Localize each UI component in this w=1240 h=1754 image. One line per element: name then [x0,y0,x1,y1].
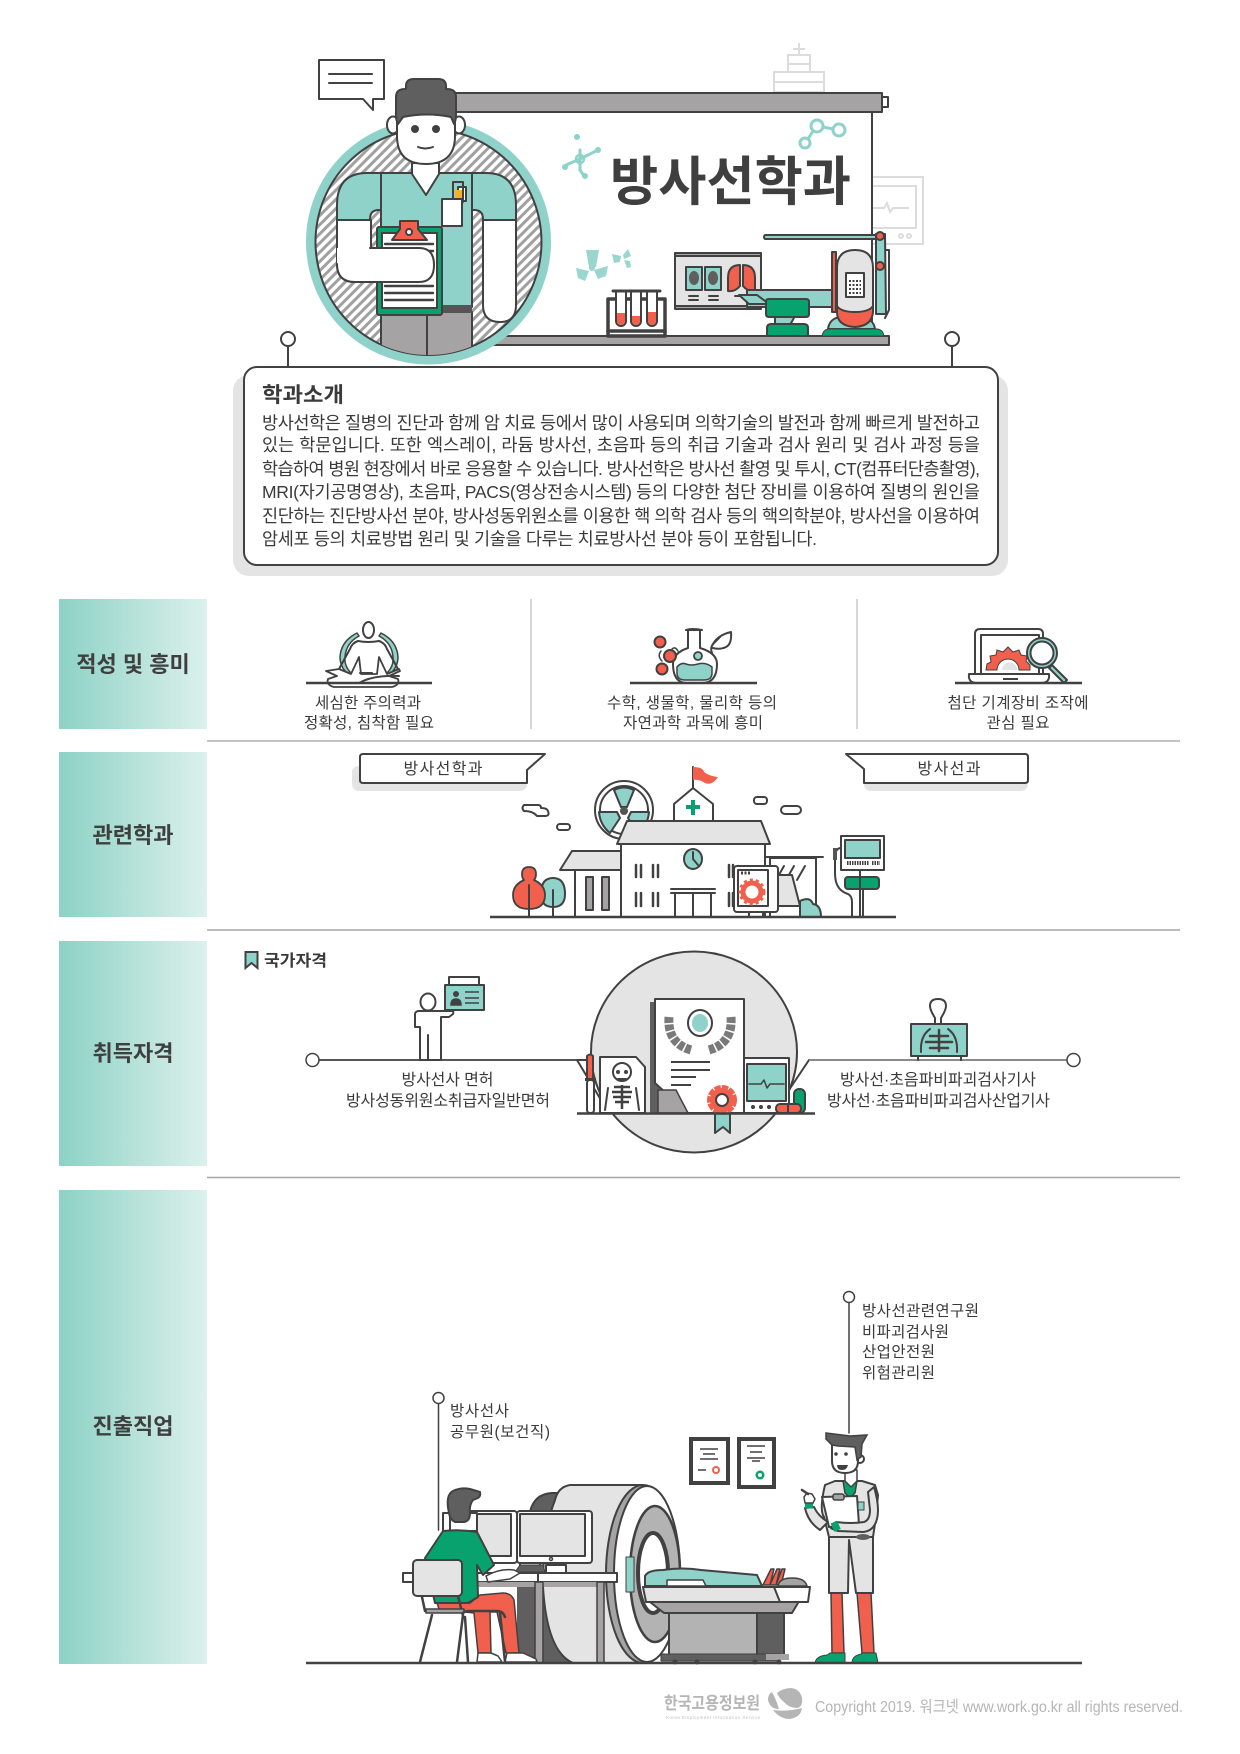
section bar: careers [59,1190,207,1664]
MRI scanner [530,1485,680,1663]
subheading: national certificates [246,952,327,970]
ground line [306,1662,1082,1664]
icon: radiography machine [739,232,889,336]
footer logo: 한국고용정보원 [664,1694,760,1713]
career label right: 산업안전원 [862,1343,935,1361]
icon: flag and steeple [674,767,718,821]
section bar: related majors: 관련학과 [93,823,173,848]
icon: hospital building [560,821,823,917]
patient on table [643,1568,810,1664]
icon: meditation [306,622,432,687]
icon: radiation wheel [595,781,653,839]
footer logo [664,1688,802,1720]
callout: 방사선학과 [352,754,545,791]
intro heading: 학과소개 [262,384,344,407]
text: aptitude 3 [948,694,1088,732]
career label left: 공무원(보건직) [450,1423,550,1441]
career label right: 방사선관련연구원 [862,1302,979,1320]
section bar: related majors [59,752,207,917]
section bar: aptitude [59,599,207,729]
icon: radiation fans [576,249,631,281]
icon: laptop with gear and magnifier [955,629,1082,683]
subheading: national certificates: 국가자격 [264,952,327,970]
text: aptitude 1: 세심한 주의력과 [315,694,421,712]
intro body text: 진단하는 진단방사선 분야, 방사성동위원소를 이용한 핵 의학 검사 등의 핵의학분야, 방사선을 이용하여 [262,506,980,526]
text: aptitude 2 [607,694,777,732]
faint monitor icon [860,177,923,244]
career label left [433,1392,550,1530]
wall certificates [691,1439,774,1487]
section bar: certificates [59,941,207,1166]
icon: clouds [522,797,801,830]
copyright: Copyright 2019. 워크넷 www.work.go.kr all rights reserved. [815,1698,1183,1716]
intro body text [262,413,980,549]
icon: H-C molecule [562,134,601,179]
intro body text: 방사선학은 질병의 진단과 함께 암 치료 등에서 많이 사용되며 의학기술의 발전과 함께 빠르게 발전하고 [262,413,980,433]
text: aptitude 3: 관심 필요 [986,714,1050,732]
certificate circle illustration [577,952,815,1152]
icon: test tubes rack [608,291,665,336]
projection screen [440,93,889,345]
icon: trees [513,867,565,917]
left connector with license holder [306,977,577,1066]
icon: speech bubble [319,60,384,110]
icon: flask [630,629,757,683]
faint hospital icon [774,43,824,92]
text: right certificates: 방사선·초음파비파괴검사산업기사 [827,1092,1050,1110]
career label right: 비파괴검사원 [862,1323,949,1341]
intro body text: 있는 학문입니다. 또한 엑스레이, 라듐 방사선, 초음파 등의 취급 기술과 검사 원리 및 검사 과정 등을 [262,435,980,455]
intro body text: 암세포 등의 치료방법 원리 및 기술을 다루는 치료방사선 분야 등이 포함됩니다. [262,529,817,549]
desk and monitors [403,1511,617,1663]
text: right certificates: 방사선·초음파비파괴검사기사 [840,1071,1036,1089]
title: 방사선학과 [610,153,851,212]
icon: medical terminal [490,836,896,917]
icon: x-ray board [675,253,761,309]
text: left licenses [346,1071,550,1110]
text: right certificates [827,1071,1050,1110]
section bar: certificates: 취득자격 [93,1041,173,1066]
text: left licenses: 방사선사 면허 [402,1071,494,1089]
text: aptitude 1: 정확성, 침착함 필요 [304,714,434,732]
callout: 방사선과: 방사선과 [918,760,981,778]
text: left licenses: 방사성동위원소취급자일반면허 [346,1092,550,1110]
text: aptitude 3: 첨단 기계장비 조작에 [948,694,1088,712]
intro body text: MRI(자기공명영상), 초음파, PACS(영상전송시스템) 등의 다양한 첨단 장비를 이용하여 질병의 원인을 [262,482,980,502]
footer logo: Korea Employment Information Service [666,1715,760,1720]
technician on chair [413,1488,537,1662]
text: aptitude 1 [304,694,434,732]
icon: linked atoms [800,120,845,148]
callout: 방사선과 [846,754,1028,791]
section bar: careers: 진출직업 [93,1414,173,1439]
right connector with x-ray [809,999,1080,1066]
career label right: 위험관리원 [862,1364,935,1382]
doctor in circle [310,79,546,362]
intro panel [233,332,1008,576]
callout: 방사선학과: 방사선학과 [404,760,483,778]
career label left: 방사선사 [450,1402,509,1420]
section bar: aptitude: 적성 및 흥미 [76,652,190,677]
text: aptitude 2: 수학, 생물학, 물리학 등의 [607,694,777,712]
career label right [844,1292,979,1433]
intro body text: 학습하여 병원 현장에서 바로 응용할 수 있습니다. 방사선학은 방사선 촬영 및 투시, CT(컴퓨터단층촬영), [262,459,980,479]
doctor with clipboard [802,1433,878,1663]
text: aptitude 2: 자연과학 과목에 흥미 [623,714,763,732]
